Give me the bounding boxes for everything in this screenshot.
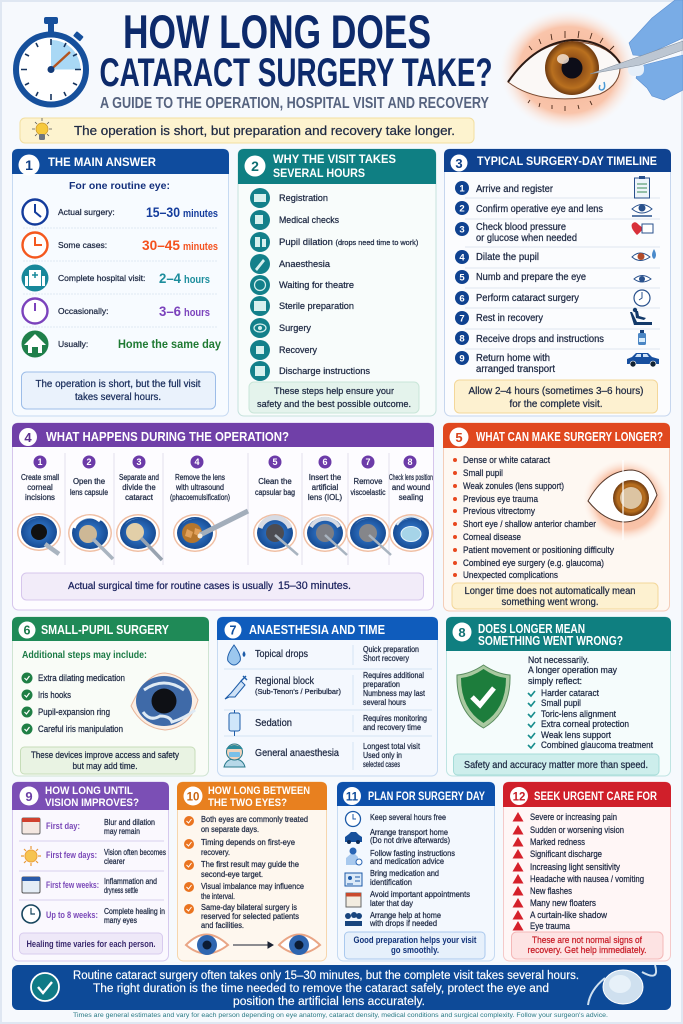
step captions: corneal: [27, 483, 53, 492]
row: first few weeks: First few weeks:: [46, 880, 99, 891]
panel 7: anaesthesia and time: [217, 617, 438, 776]
key message callout: The operation is short, but preparation and recovery take longer.: [74, 124, 455, 138]
row: topical drops: Topical drops: [255, 649, 308, 660]
timeline steps: Confirm operative eye and lens: [476, 204, 603, 215]
row: general anaesthesia: [224, 741, 421, 769]
heading: ANAESTHESIA AND TIME: [249, 622, 385, 637]
callout: for the complete visit.: [510, 399, 602, 410]
checklist: [184, 814, 308, 930]
checklist: Toric-lens alignment: [541, 709, 616, 719]
explanation text: A longer operation may: [528, 665, 617, 675]
row: general anaesthesia: selected cases: [363, 759, 400, 769]
checklist: Same-day bilateral surgery is: [201, 902, 298, 912]
step labels: Anaesthesia: [279, 259, 331, 270]
checklist: recovery.: [201, 847, 230, 857]
warning list: Sudden or worsening vision: [530, 825, 624, 835]
row: sedation: Sedation: [255, 718, 292, 729]
panel 8: does longer mean something went wrong: 8: [458, 625, 466, 640]
row: first few days: [21, 846, 166, 866]
checklist: [528, 688, 653, 750]
checklist: Pupil-expansion ring: [38, 707, 110, 717]
row: up to 8 weeks: Up to 8 weeks:: [46, 910, 98, 921]
step captions: (phacoemulsification): [170, 493, 230, 502]
timeline steps: Numb and prepare the eye: [476, 272, 587, 283]
row: first day: may remain: [104, 826, 140, 836]
panel 11: plan for surgery day: [337, 782, 495, 961]
timeline steps: 2: [459, 204, 465, 214]
plan list: later that day: [370, 898, 414, 908]
plan list: (Do not drive afterwards): [370, 835, 450, 845]
panel 1: the main answer: [12, 149, 229, 416]
panel 10: how long between the two eyes: [12, 782, 671, 1019]
title: [100, 5, 492, 95]
warning list: Many new floaters: [530, 898, 596, 908]
heading: VISION IMPROVES?: [45, 797, 139, 809]
icon: light bulb: [32, 118, 52, 140]
heading: SEVERAL HOURS: [273, 166, 365, 180]
step captions: lens capsule: [70, 488, 108, 497]
row: first few weeks: [22, 876, 157, 895]
heading: PLAN FOR SURGERY DAY: [368, 791, 485, 803]
row: some cases: minutes: [183, 241, 218, 253]
step icons: [250, 188, 270, 381]
panel 2: why the visit takes several hours: 2: [251, 158, 259, 174]
row: general anaesthesia: Used only in: [363, 750, 402, 760]
timeline steps: Check blood pressure: [476, 222, 567, 233]
risk factor list: Weak zonules (lens support): [463, 481, 564, 491]
step captions: viscoelastic: [350, 488, 386, 497]
heading: THE TWO EYES?: [208, 797, 287, 809]
warning list: Eye trauma: [530, 921, 571, 931]
step number badges: 4: [194, 457, 200, 467]
checklist: on separate days.: [201, 824, 259, 834]
plan list: identification: [370, 877, 412, 887]
timeline steps: Dilate the pupil: [476, 252, 539, 263]
row: topical drops: Quick preparation: [363, 644, 419, 654]
plan list: Arrange help at home: [370, 910, 441, 920]
row: regional block: several hours: [363, 697, 406, 707]
plan list: Arrange transport home: [370, 827, 448, 837]
row: complete hospital visit: [22, 264, 210, 292]
subheading: Additional steps may include:: [22, 650, 147, 661]
icon: artificial lens: [588, 965, 656, 1005]
plan list: Bring medication and: [370, 868, 439, 878]
warning list: Significant discharge: [530, 849, 602, 859]
step captions: [21, 473, 433, 502]
step captions: cataract: [125, 493, 154, 502]
checklist: second-eye target.: [201, 869, 263, 879]
timeline steps: [455, 181, 604, 375]
panel 9: how long until vision improves: 9: [25, 789, 33, 804]
warning list: [530, 812, 644, 931]
row: actual surgery: minutes: [183, 208, 218, 220]
callout: The operation is short, but the full visit: [36, 379, 201, 390]
callout: something went wrong.: [502, 597, 598, 608]
risk factor list: Patient movement or positioning difficulty: [463, 545, 614, 555]
risk factor list: Previous eye trauma: [463, 494, 539, 504]
row: first day: First day:: [46, 821, 80, 832]
row: usually: [22, 330, 221, 358]
plan list: Follow fasting instructions: [370, 848, 455, 858]
checklist: Timing depends on first-eye: [201, 837, 295, 847]
callout: but may add time.: [72, 761, 138, 771]
warning list: Headache with nausea / vomiting: [530, 874, 644, 884]
step captions: incisions: [25, 493, 55, 502]
row: regional block: Regional block: [255, 676, 315, 687]
step labels: Registration: [279, 193, 328, 204]
timeline steps: Rest in recovery: [476, 313, 543, 324]
step labels: [279, 193, 418, 377]
warning list: Increasing light sensitivity: [530, 862, 620, 872]
callout: [22, 573, 424, 600]
callout: These devices improve access and safety: [31, 750, 180, 760]
footnote: Times are general estimates and vary for each person depending on eye anatomy, cataract density, medical conditions and surgical complexity. Follow your surgeon's advice.: [73, 1012, 608, 1019]
heading: THE MAIN ANSWER: [48, 155, 156, 169]
risk factor list: Previous vitrectomy: [463, 506, 535, 516]
step captions: capsular bag: [255, 488, 295, 497]
panel 7: anaesthesia and time: 7: [230, 624, 237, 638]
callout: Allow 2–4 hours (sometimes 3–6 hours): [468, 386, 644, 397]
title: HOW LONG DOES: [123, 5, 431, 58]
heading: SEEK URGENT CARE FOR: [534, 789, 657, 803]
risk factor list: Combined eye surgery (e.g. glaucoma): [463, 558, 604, 568]
step number badges: 8: [407, 457, 413, 467]
timeline steps: 3: [459, 224, 465, 236]
step number badges: 1: [37, 457, 43, 467]
step captions: Clean the: [258, 477, 292, 486]
callout: [249, 382, 419, 413]
row: regional block: preparation: [363, 679, 400, 689]
row: some cases: [22, 232, 218, 258]
timeline steps: 7: [459, 314, 465, 324]
heading: TYPICAL SURGERY-DAY TIMELINE: [477, 154, 657, 168]
explanation text: simply reflect:: [528, 676, 582, 686]
row: sedation: [229, 710, 427, 736]
checklist: Both eyes are commonly treated: [201, 814, 308, 824]
callout: [452, 583, 658, 609]
checklist: Weak lens support: [541, 730, 611, 740]
callout: These are not normal signs of: [532, 935, 642, 946]
summary text: [73, 970, 579, 1008]
panel 8: does longer mean something went wrong: [446, 617, 671, 776]
plan list: [369, 812, 470, 928]
checklist: the interval.: [201, 891, 235, 901]
timeline steps: arranged transport: [476, 364, 555, 375]
checklist: Extra corneal protection: [541, 719, 629, 729]
key message callout: [20, 118, 474, 143]
panel 3: typical surgery-day timeline: [444, 149, 671, 416]
timeline steps: 5: [459, 272, 465, 284]
heading: WHY THE VISIT TAKES: [273, 152, 396, 166]
heading: SMALL-PUPIL SURGERY: [41, 622, 169, 637]
step number badges: 7: [365, 457, 371, 467]
step captions: with ultrasound: [175, 483, 224, 492]
callout: [512, 932, 663, 959]
checklist: The first result may guide the: [201, 859, 299, 869]
surgical step eye illustrations: [17, 511, 433, 560]
timeline icons: [627, 176, 659, 367]
step captions: Insert the: [309, 473, 341, 482]
row: general anaesthesia: Longest total visit: [363, 741, 421, 751]
timeline steps: or glucose when needed: [476, 233, 577, 244]
timeline steps: Return home with: [476, 353, 550, 364]
icon: cataract eye: [583, 459, 669, 541]
step captions: Create small: [21, 473, 59, 482]
panel 9: how long until vision improves: [12, 782, 169, 961]
icon: surgical eye illustration: [500, 0, 683, 130]
stopwatch icon: [16, 17, 86, 104]
row: occasionally: [22, 298, 210, 324]
panel 1: the main answer: 1: [25, 157, 33, 173]
row: regional block: (Sub-Tenon's / Peribulbar): [255, 689, 341, 696]
step labels: Surgery: [279, 323, 311, 334]
warning icons: [512, 812, 524, 930]
warning list: A curtain-like shadow: [530, 910, 607, 920]
step number badges: 5: [272, 457, 278, 467]
row: sedation: Requires monitoring: [363, 713, 427, 723]
plan list: Avoid important appointments: [370, 889, 470, 899]
timeline steps: 8: [459, 334, 465, 344]
checklist: Careful iris manipulation: [38, 724, 123, 734]
plan list: Keep several hours free: [370, 812, 446, 822]
checklist: Visual imbalance may influence: [201, 881, 304, 891]
step captions: divide the: [122, 483, 156, 492]
checklist: Harder cataract: [541, 688, 599, 698]
timeline steps: 4: [459, 252, 465, 264]
heading: [478, 622, 623, 648]
icon: eye with pupil expansion ring: [131, 673, 198, 730]
row: first few days: Vision often becomes: [104, 847, 166, 857]
heading: [273, 152, 396, 180]
callout: 15–30 minutes.: [278, 580, 351, 592]
summary text: position the artificial lens accurately.: [233, 996, 425, 1008]
row: occasionally: Occasionally:: [58, 306, 109, 316]
row: up to 8 weeks: Complete healing in: [104, 906, 165, 916]
icon: first eye: [186, 934, 228, 955]
row: occasionally: hours: [184, 307, 210, 319]
row: some cases: Some cases:: [58, 240, 107, 250]
risk factor list: Unexpected complications: [463, 570, 558, 580]
summary text: The right duration is the time needed to remove the cataract safely, protect the eye and: [93, 983, 549, 995]
icon: check circle: [31, 973, 59, 1001]
row: actual surgery: Actual surgery:: [58, 207, 115, 217]
step captions: and wound: [392, 483, 430, 492]
step labels: Medical checks: [279, 215, 339, 226]
row: occasionally: 3–6: [159, 303, 181, 319]
checklist: Iris hooks: [38, 690, 71, 700]
panel 10: how long between the two eyes: 10: [187, 792, 199, 804]
summary banner: [12, 965, 671, 1010]
row: some cases: 30–45: [142, 237, 180, 253]
step captions: artificial: [312, 483, 338, 492]
row: topical drops: Short recovery: [363, 653, 410, 663]
timeline steps: Arrive and register: [476, 184, 554, 195]
callout: recovery. Get help immediately.: [528, 945, 646, 956]
row: actual surgery: [22, 200, 218, 224]
step captions: sealing: [399, 493, 423, 502]
checklist: and facilities.: [201, 920, 244, 930]
panel 12: seek urgent care for: 12: [513, 792, 525, 804]
heading: [45, 785, 139, 809]
risk factor list: Small pupil: [463, 468, 503, 478]
step number badges: 3: [136, 457, 142, 467]
step labels: Waiting for theatre: [279, 280, 354, 291]
icon: second eye: [279, 934, 320, 955]
subtitle: A GUIDE TO THE OPERATION, HOSPITAL VISIT AND RECOVERY: [100, 95, 490, 112]
step captions: Remove the lens: [175, 473, 225, 482]
callout: go smoothly.: [391, 945, 439, 956]
panel 6: small-pupil surgery: 6: [24, 624, 31, 638]
panel 11: plan for surgery day: 11: [346, 792, 359, 804]
subheading: For one routine eye:: [69, 180, 170, 192]
row: actual surgery: 15–30: [146, 204, 180, 220]
callout: Safety and accuracy matter more than speed.: [464, 760, 648, 771]
panel 4: what happens during the operation: 4: [24, 430, 32, 445]
warning list: New flashes: [530, 886, 572, 896]
row: up to 8 weeks: many eyes: [104, 915, 137, 925]
row: regional block: [225, 670, 426, 707]
arrow: [233, 942, 273, 948]
row: general anaesthesia: General anaesthesia: [255, 748, 339, 759]
row: first day: [22, 817, 155, 836]
step labels: Recovery: [279, 345, 317, 356]
heading: DOES LONGER MEAN: [478, 622, 585, 636]
plan icons: [345, 812, 362, 926]
row: first day: Blur and dilation: [104, 817, 155, 827]
timeline steps: 9: [459, 354, 465, 364]
step captions: Check lens position: [389, 473, 433, 482]
callout: [20, 933, 162, 954]
checklist: Small pupil: [541, 698, 581, 708]
step captions: Open the: [73, 477, 105, 486]
panel 6: small-pupil surgery: [12, 617, 209, 776]
row: topical drops: [228, 644, 419, 665]
heading: SOMETHING WENT WRONG?: [478, 634, 623, 648]
row: complete hospital visit: Complete hospital visit:: [58, 273, 145, 283]
row: first few days: clearer: [104, 856, 125, 866]
summary text: Routine cataract surgery often takes only 15–30 minutes, but the complete visit takes several hours.: [73, 970, 579, 982]
row: usually: Home the same day: [118, 337, 221, 351]
title: CATARACT SURGERY TAKE?: [100, 51, 492, 95]
timeline steps: Perform cataract surgery: [476, 293, 579, 304]
row: first few weeks: Inflammation and: [104, 876, 157, 886]
callout: Healing time varies for each person.: [26, 939, 156, 949]
warning list: Severe or increasing pain: [530, 812, 617, 822]
step number badges: 2: [86, 457, 92, 467]
checklist: Combined glaucoma treatment: [541, 740, 653, 750]
callout: Actual surgical time for routine cases is usually: [68, 581, 273, 592]
checklist: [22, 672, 125, 734]
panel 5: what can make surgery longer: 5: [455, 430, 463, 445]
plan list: with drops if needed: [369, 918, 437, 928]
row: complete hospital visit: 2–4: [159, 270, 181, 286]
callout: [454, 380, 658, 413]
heading: HOW LONG BETWEEN: [208, 785, 310, 797]
callout: [22, 372, 216, 409]
row: first few days: First few days:: [46, 850, 97, 861]
row: first few weeks: dryness settle: [104, 885, 138, 895]
explanation text: [528, 655, 617, 686]
checklist: reserved for selected patients: [201, 911, 300, 921]
risk factor list: Corneal disease: [463, 532, 521, 542]
callout: Longer time does not automatically mean: [464, 586, 636, 597]
warning list: Marked redness: [530, 837, 585, 847]
step captions: Remove: [353, 477, 383, 486]
step number badges: [34, 456, 416, 468]
step labels: Discharge instructions: [279, 366, 370, 377]
timeline steps: 1: [459, 184, 465, 194]
risk factor list: Dense or white cataract: [463, 455, 550, 465]
panel 5: what can make surgery longer: [443, 423, 670, 611]
step captions: lens (IOL): [308, 493, 343, 502]
row: regional block: Requires additional: [363, 670, 424, 680]
checklist: Extra dilating medication: [38, 673, 125, 683]
row: up to 8 weeks: [22, 905, 165, 925]
panel 4: what happens during the operation: [12, 423, 434, 610]
callout: safety and the best possible outcome.: [257, 399, 411, 410]
heading: HOW LONG UNTIL: [45, 785, 133, 797]
row: regional block: Numbness may last: [363, 688, 426, 698]
step labels: Pupil dilation (drops need time to work): [279, 237, 418, 248]
callout: Good preparation helps your visit: [354, 935, 477, 946]
row: sedation: and recovery time: [363, 722, 421, 732]
panel 2: why the visit takes several hours: [238, 149, 436, 416]
callout: [454, 754, 659, 775]
step labels: Sterile preparation: [279, 301, 354, 312]
plan list: and medication advice: [370, 856, 444, 866]
risk factor list: Short eye / shallow anterior chamber: [463, 519, 596, 529]
step number badges: 6: [322, 457, 328, 467]
callout: [344, 932, 485, 959]
panel 12: seek urgent care for: [503, 782, 671, 961]
row: usually: Usually:: [58, 339, 88, 349]
explanation text: Not necessarily.: [528, 655, 589, 665]
heading: WHAT HAPPENS DURING THE OPERATION?: [46, 429, 289, 444]
risk factor list: [453, 455, 614, 580]
heading: [208, 785, 310, 809]
callout: These steps help ensure your: [274, 386, 395, 397]
row: complete hospital visit: hours: [184, 274, 210, 286]
icon: shield with check: [457, 665, 510, 728]
callout: takes several hours.: [75, 392, 161, 403]
timeline steps: Receive drops and instructions: [476, 334, 604, 345]
callout: [20, 747, 195, 774]
timeline steps: 6: [459, 294, 465, 304]
panel 3: typical surgery-day timeline: 3: [455, 156, 463, 171]
step captions: Separate and: [119, 473, 159, 482]
